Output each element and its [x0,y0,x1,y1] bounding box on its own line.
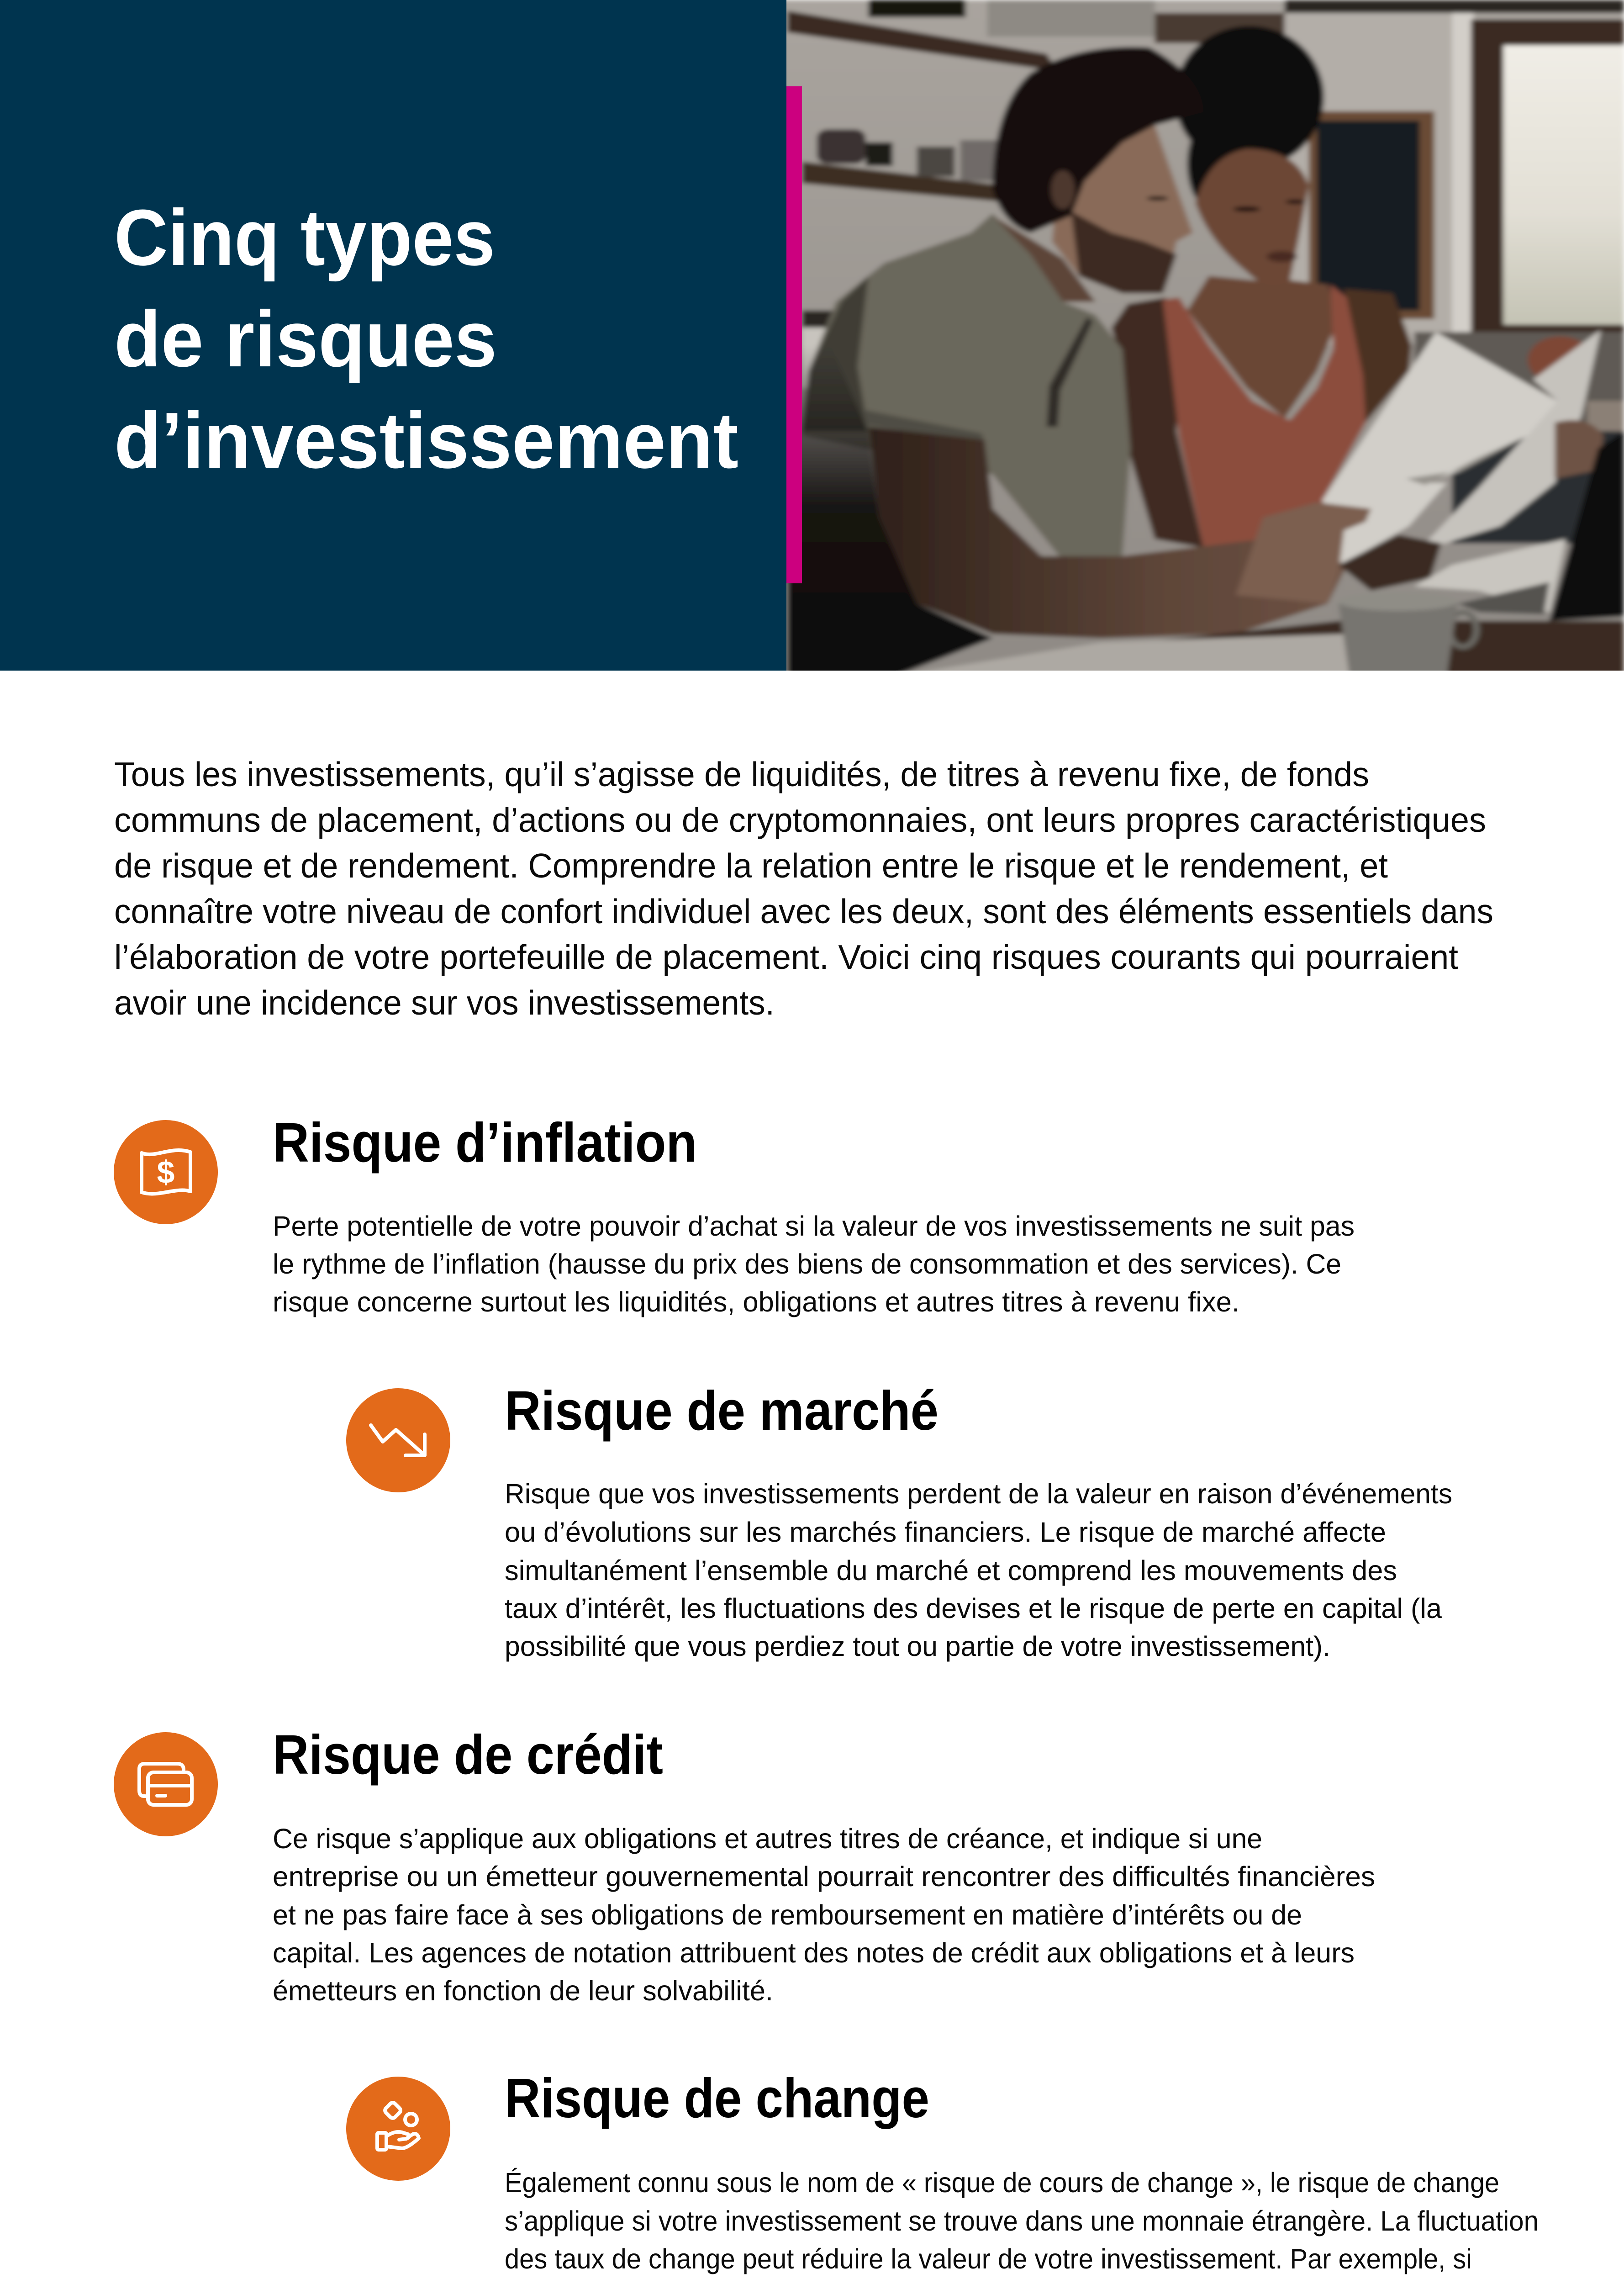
panel: currency risk [346,2067,1539,2284]
body text: risque concerne surtout les liquidités, obligations et autres titres à revenu fixe. [273,1286,1239,1317]
heading: Risque de change [505,2067,929,2129]
intro paragraph: communs de placement, d’actions ou de cryptomonnaies, ont leurs propres caractéristiques [114,801,1486,839]
man [787,47,1350,676]
body text: et ne pas faire face à ses obligations de remboursement en matière d’intérêts ou de [273,1899,1302,1930]
title: de risques [114,294,497,383]
heading: Risque d’inflation [273,1111,697,1174]
accent bar [786,86,802,583]
heading: Risque de marché [505,1380,939,1442]
intro paragraph [114,755,1493,1022]
title: d’investissement [114,396,738,485]
body text: simultanément l’ensemble du marché et comprend les mouvements des [505,1555,1397,1586]
body text [505,1478,1452,1662]
panel: credit risk [114,1724,1375,2006]
body text: le rythme de l’inflation (hausse du prix des biens de consommation et des services). Ce [273,1248,1341,1279]
icon: hand with coins [346,2077,450,2181]
body text [273,1211,1355,1317]
body text: Risque que vos investissements perdent de la valeur en raison d’événements [505,1478,1452,1509]
title [114,193,738,485]
body text: capital. Les agences de notation attribuent des notes de crédit aux obligations et à leurs [273,1937,1355,1968]
body text [273,1823,1375,2006]
icon: falling trend arrow [346,1388,450,1492]
title: Cinq types [114,193,495,282]
woman [1112,26,1412,560]
body text: s’applique si votre investissement se trouve dans une monnaie étrangère. La fluctuation [505,2205,1539,2236]
panel: inflation risk [114,1111,1355,1317]
body text: émetteurs en fonction de leur solvabilité. [273,1975,773,2006]
body text: ou d’évolutions sur les marchés financiers. Le risque de marché affecte [505,1517,1386,1548]
body text: des taux de change peut réduire la valeur de votre investissement. Par exemple, si [505,2243,1472,2274]
icon: banknote [114,1120,218,1224]
intro paragraph: connaître votre niveau de confort individuel avec les deux, sont des éléments essentiels dans [114,892,1493,931]
body text: taux d’intérêt, les fluctuations des devises et le risque de perte en capital (la [505,1593,1442,1624]
intro paragraph: l’élaboration de votre portefeuille de placement. Voici cinq risques courants qui pourraient [114,938,1458,976]
body text: Ce risque s’applique aux obligations et autres titres de créance, et indique si une [273,1823,1262,1854]
intro paragraph: Tous les investissements, qu’il s’agisse de liquidités, de titres à revenu fixe, de fonds [114,755,1369,793]
intro paragraph: avoir une incidence sur vos investissements. [114,983,775,1022]
body text [505,2167,1539,2284]
body text: Également connu sous le nom de « risque de cours de change », le risque de change [505,2167,1499,2198]
intro paragraph: de risque et de rendement. Comprendre la relation entre le risque et le rendement, et [114,846,1388,885]
header panel [0,0,786,671]
body text: possibilité que vous perdiez tout ou partie de votre investissement). [505,1631,1330,1662]
icon: credit cards [114,1732,218,1836]
table, laptop and mug [895,431,1624,676]
body text: Perte potentielle de votre pouvoir d’achat si la valeur de vos investissements ne suit pas [273,1211,1355,1242]
heading: Risque de crédit [273,1724,663,1786]
photo: couple reviewing documents [776,0,1624,676]
papers and hands [1236,330,1603,603]
body text: entreprise ou un émetteur gouvernemental pourrait rencontrer des difficultés financières [273,1861,1375,1892]
icon: banknote: $ [157,1154,174,1190]
panel: market risk [346,1380,1452,1662]
